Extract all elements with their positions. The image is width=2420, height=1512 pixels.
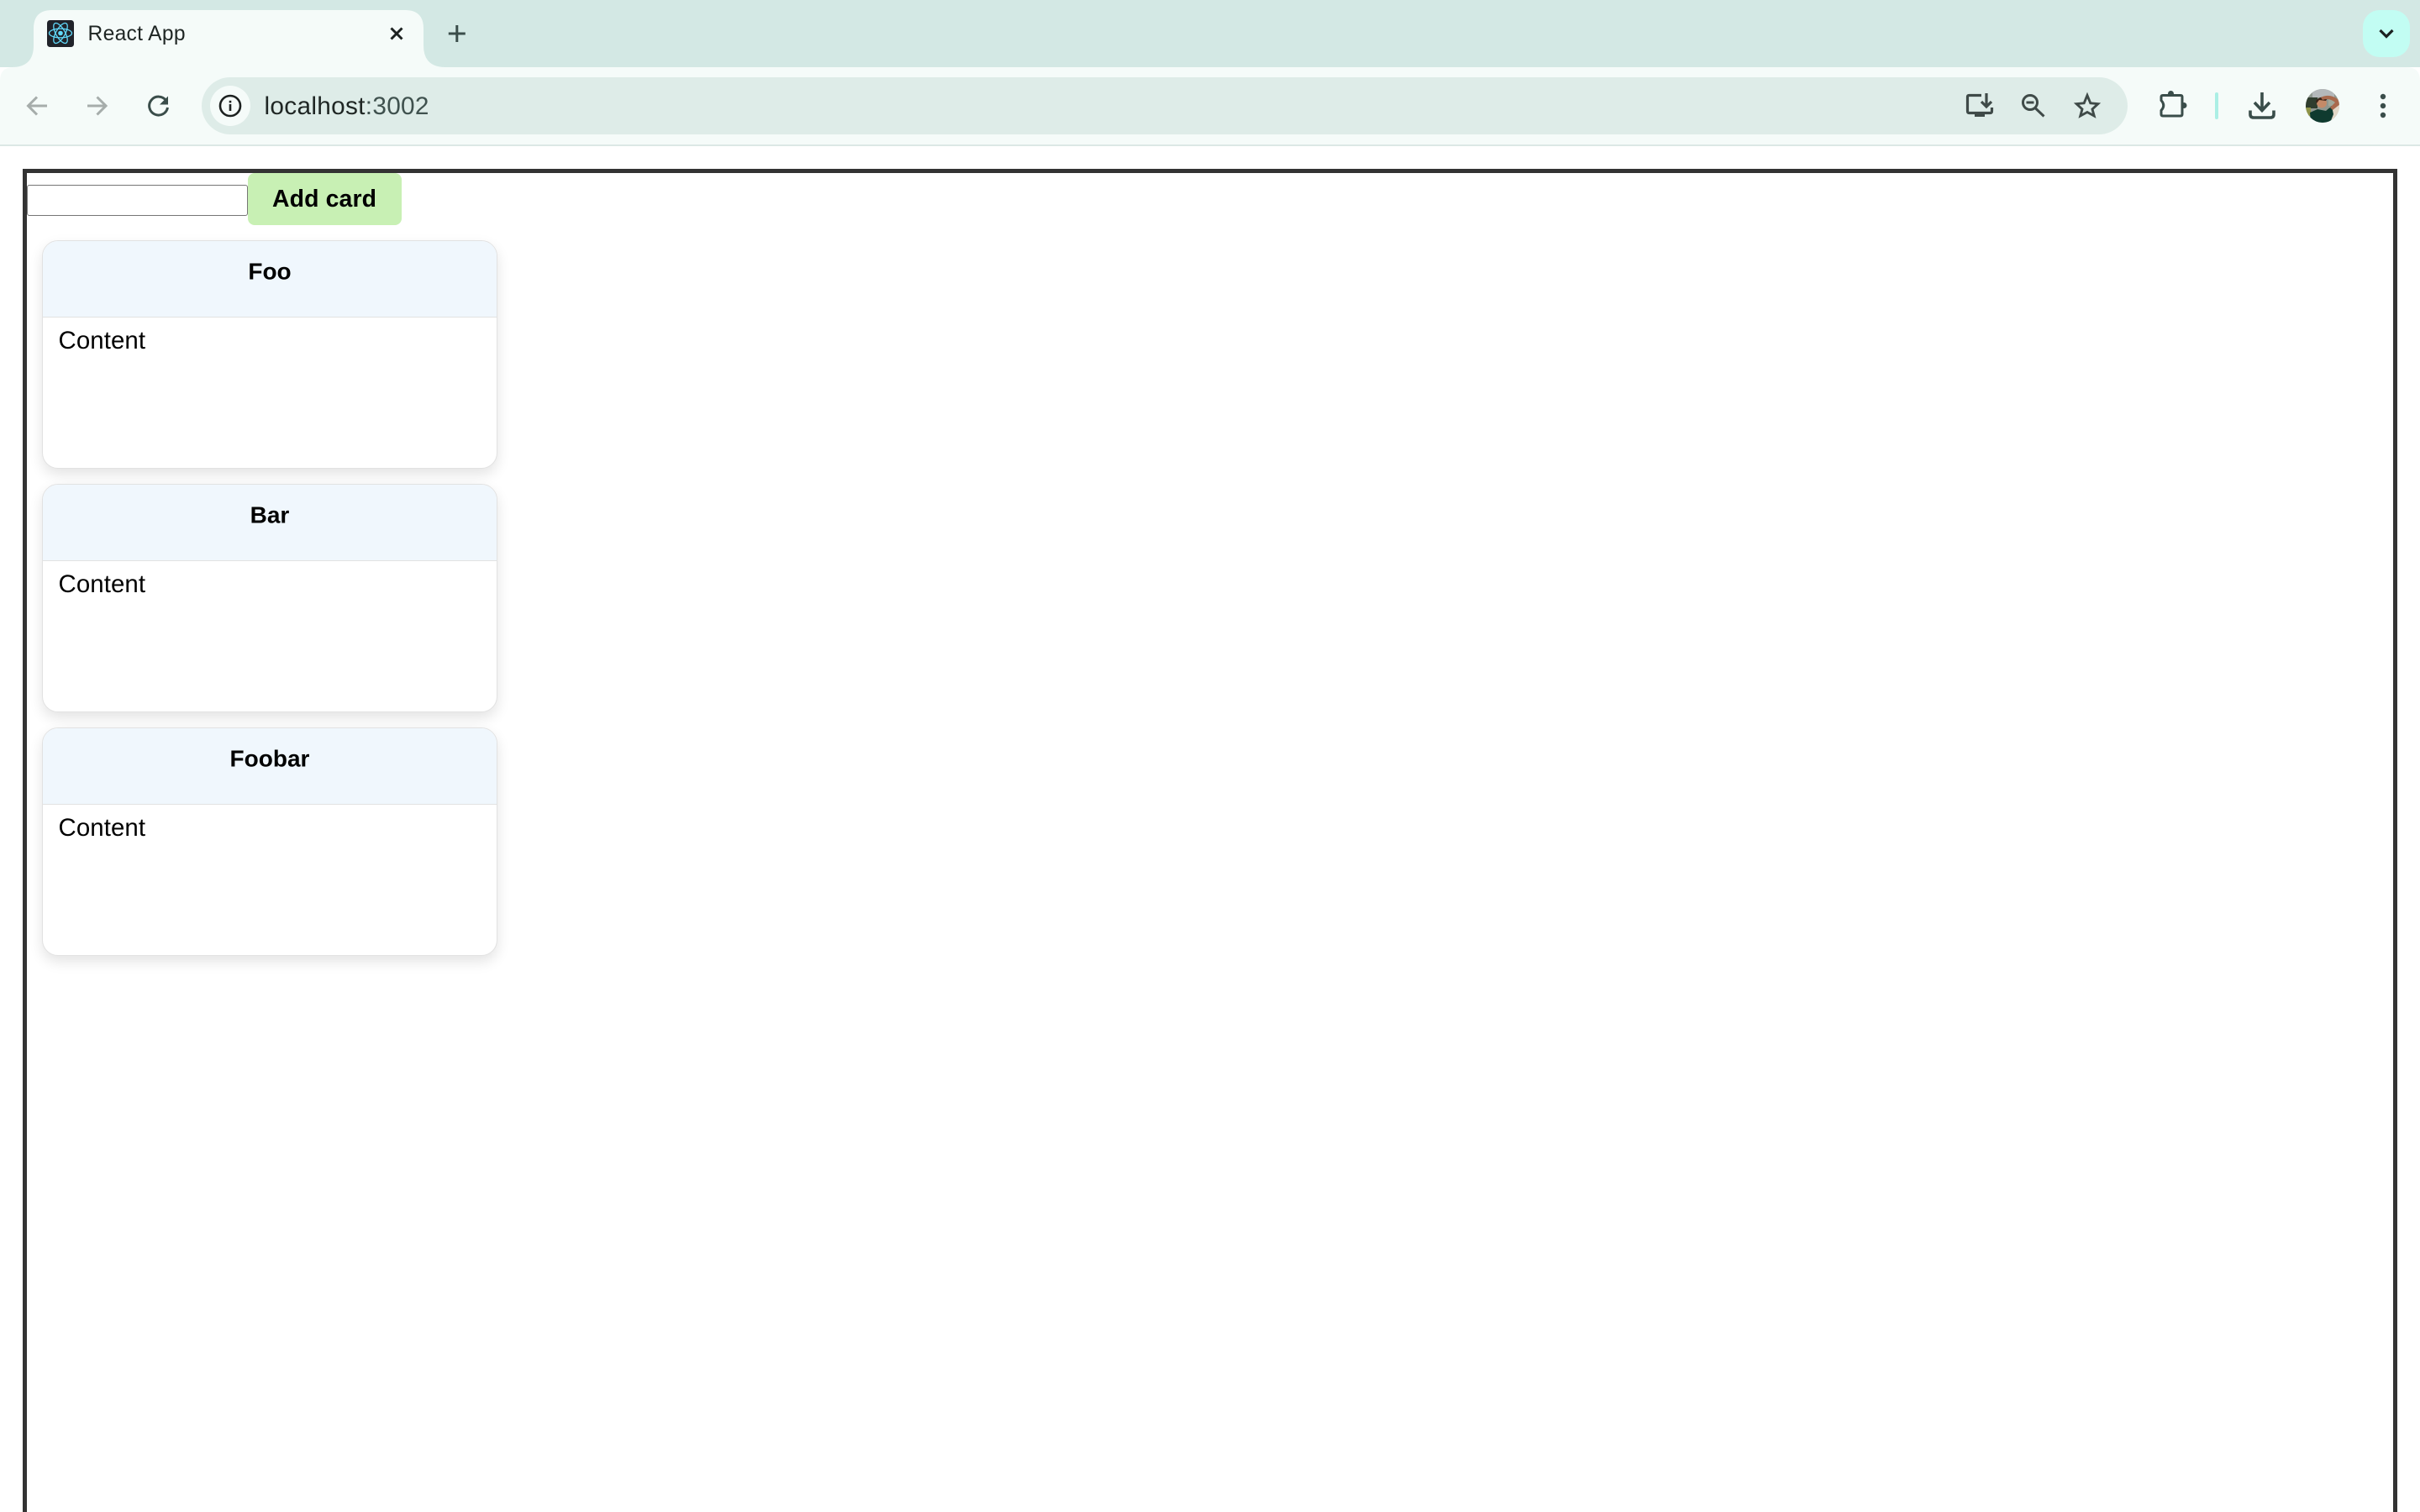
card: Bar <box>42 484 497 712</box>
tab search button <box>2363 10 2410 57</box>
icon: zoom out <box>2023 96 2044 116</box>
icon: back <box>29 97 47 114</box>
card body: Content <box>59 327 145 354</box>
divider <box>2215 92 2218 119</box>
card header: Bar <box>250 502 289 528</box>
icon: bookmark star <box>2076 96 2098 116</box>
card header: Foo <box>248 259 292 284</box>
icon: browser menu <box>2381 94 2386 118</box>
icon: reload <box>150 96 168 115</box>
icon: new tab <box>449 25 466 42</box>
card body: Content <box>59 570 145 598</box>
card header <box>43 241 497 318</box>
icon: site info <box>210 86 250 126</box>
icon: install app <box>1968 93 1991 117</box>
tab strip <box>0 0 2420 67</box>
text input <box>27 185 248 216</box>
icon: react favicon <box>47 20 74 47</box>
card header <box>43 728 497 805</box>
card body: Content <box>59 814 145 842</box>
card header <box>43 485 497 561</box>
add card button: Add card <box>272 186 376 213</box>
add card button <box>248 173 402 225</box>
icon: profile avatar <box>2306 89 2340 123</box>
card: Foo <box>42 240 497 469</box>
tab title: React App <box>87 23 185 45</box>
icon: close tab <box>392 29 402 39</box>
card: Foobar <box>42 727 497 956</box>
url: localhost:3002 <box>264 92 429 120</box>
icon: extensions <box>2161 91 2186 116</box>
address bar <box>202 77 2128 134</box>
icon: downloads <box>2250 92 2274 118</box>
icon: forward <box>87 97 106 114</box>
active tab <box>12 10 445 67</box>
browser chrome <box>0 0 2420 146</box>
card header: Foobar <box>230 746 310 771</box>
toolbar <box>0 67 2420 146</box>
